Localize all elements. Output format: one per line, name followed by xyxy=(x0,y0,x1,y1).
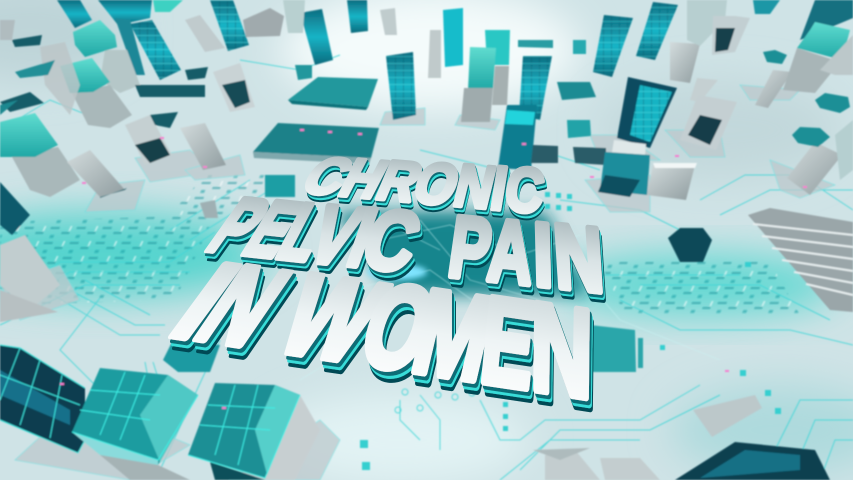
title line: in women: M xyxy=(402,264,504,407)
teal square right of title xyxy=(590,325,643,372)
title line: pelvic pain xyxy=(192,182,606,312)
tower: blue centre right xyxy=(498,56,552,170)
title line: pelvic pain: N xyxy=(551,206,606,312)
title line: pelvic pain: A xyxy=(485,201,536,304)
teal cube bottom centre xyxy=(188,383,320,480)
title line: pelvic pain: I xyxy=(338,190,387,284)
heat sink right xyxy=(748,208,853,312)
small dark chips left xyxy=(0,35,312,128)
teal data blocks on the board xyxy=(265,175,781,470)
towers: top left group xyxy=(57,0,249,80)
silver transistors right xyxy=(680,16,750,150)
title line: in women xyxy=(148,241,593,425)
title line: chronic: R xyxy=(368,148,432,214)
teal chips right xyxy=(668,50,850,262)
title line: chronic: H xyxy=(330,147,398,210)
tower: glass hex left upper xyxy=(73,20,140,93)
lens glow xyxy=(367,264,427,280)
title line: pelvic pain: V xyxy=(295,188,375,282)
silver transistor left xyxy=(125,63,255,165)
dark circuit cube bottom left xyxy=(0,345,85,453)
title line: pelvic pain: P xyxy=(443,197,497,298)
tower: glass hex right xyxy=(783,22,850,93)
teal cube bottom left xyxy=(72,368,198,480)
teal blob under title xyxy=(163,342,220,372)
right edge pillar xyxy=(820,35,853,180)
network lines behind title xyxy=(300,215,720,380)
title line: pelvic pain: P xyxy=(192,182,286,270)
gray pillars right xyxy=(647,0,842,200)
title line: chronic: N xyxy=(448,153,501,222)
title line: chronic xyxy=(291,146,548,227)
title line: in women: N xyxy=(530,275,593,425)
tower: glass hex left middle xyxy=(60,58,132,128)
title line: pelvic pain: L xyxy=(264,186,344,278)
title line: in women: E xyxy=(475,270,541,415)
left edge blocks xyxy=(0,100,60,322)
small components centre right xyxy=(518,40,606,165)
tower: teal glass and gray centre xyxy=(461,47,509,122)
chip: large teal processor top xyxy=(253,123,379,164)
title line: chronic: C xyxy=(501,155,548,227)
title line: pelvic pain: I xyxy=(532,205,554,307)
title line: in women: N xyxy=(174,243,312,369)
title line: pelvic pain: C xyxy=(352,191,431,289)
towers: upper right xyxy=(593,0,853,148)
transistor centre right xyxy=(598,140,650,197)
title line: chronic: O xyxy=(406,150,467,217)
title line: chronic: C xyxy=(291,146,365,206)
title line: in women: O xyxy=(347,258,450,396)
title line: pelvic pain: E xyxy=(229,184,317,274)
title xyxy=(148,146,606,425)
dark circuit block bottom right xyxy=(675,442,830,480)
title line: in women: I xyxy=(148,241,262,362)
title line: chronic: I xyxy=(486,154,512,224)
tower: glass hex far left xyxy=(0,113,80,197)
circuit detail in glow bands xyxy=(0,175,800,315)
magenta data markers xyxy=(60,129,807,409)
small device left of title xyxy=(200,200,218,218)
title line: in women: W xyxy=(260,251,403,386)
chip: teal processor upper xyxy=(288,77,378,110)
silver device bottom right xyxy=(533,395,762,480)
towers: top centre xyxy=(283,0,510,120)
gray pillars left xyxy=(0,8,284,198)
